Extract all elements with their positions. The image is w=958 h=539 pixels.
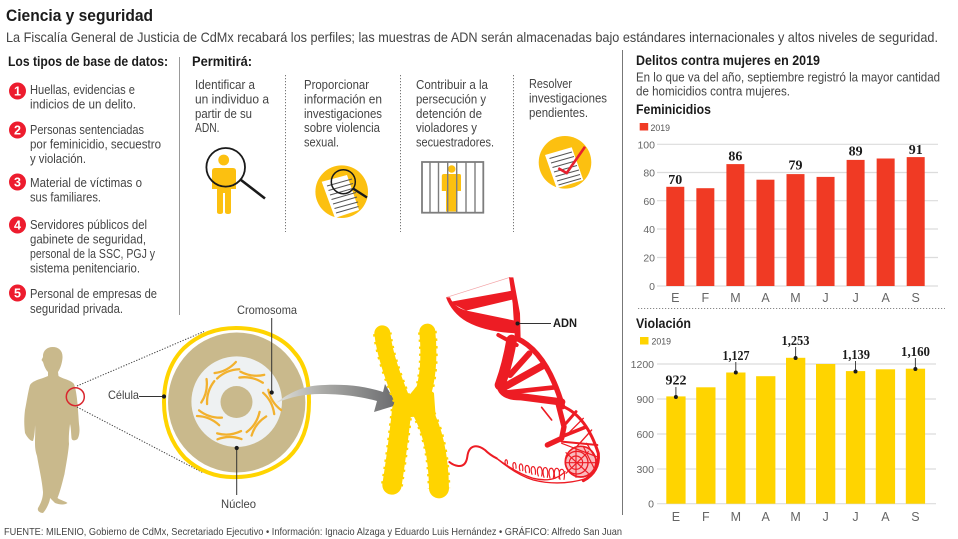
illustration: human body (24, 347, 84, 513)
value labels: 89 (849, 144, 863, 160)
y axis labels: 0 (648, 498, 654, 510)
nucleus (191, 356, 282, 447)
x axis labels (671, 291, 920, 305)
x axis labels (672, 510, 920, 524)
bars (666, 157, 925, 286)
list item 3: Material de víctimas o (30, 175, 142, 190)
x axis labels: J (852, 510, 859, 524)
cytoplasm (168, 332, 305, 472)
text: proporcionar: información en (304, 92, 382, 106)
description (636, 70, 940, 99)
list item 4: Servidores públicos del (30, 217, 147, 232)
text: contribuir: detención de (416, 106, 482, 121)
panel: tipos de base de datos (8, 54, 168, 316)
text: resolver (529, 76, 607, 120)
x axis labels: S (912, 291, 920, 305)
label: cromosoma: Cromosoma (237, 303, 297, 317)
list item 3: sus familiares. (30, 190, 101, 204)
legend (640, 337, 671, 348)
text: proporcionar (304, 77, 382, 150)
x axis labels: A (882, 291, 891, 305)
x axis labels: M (790, 291, 801, 305)
icon: body silhouette (24, 347, 80, 513)
gridlines (657, 364, 936, 504)
value labels: 91 (909, 143, 923, 158)
list item 5: seguridad privada. (30, 301, 123, 316)
x axis labels: E (672, 510, 680, 524)
value labels (668, 143, 923, 188)
list item 3 (9, 174, 142, 204)
list item 5: Personal de empresas de (30, 286, 157, 301)
list item 2: 2 (14, 124, 21, 138)
value labels: 922 (666, 374, 686, 388)
list item 1: 1 (14, 84, 21, 98)
illustration: big chromosome (382, 332, 439, 488)
red circle highlight (66, 388, 84, 406)
x axis labels: S (911, 510, 920, 524)
label: ADN (516, 316, 577, 330)
value labels: 1,160 (901, 345, 930, 360)
text: contribuir: secuestradores. (416, 134, 494, 150)
heading: tipos de base de datos: Los tipos de base de datos: (8, 54, 168, 69)
list item 4 (9, 216, 155, 276)
value labels: 1,253 (782, 334, 810, 349)
chart: violación (631, 316, 936, 524)
y axis labels: 20 (643, 252, 655, 264)
illustration: cell (108, 303, 309, 511)
x axis labels: A (881, 510, 890, 524)
text: resolver: Resolver (529, 76, 573, 91)
arrow: nucleus to chromosome (276, 384, 397, 412)
x axis labels: M (731, 510, 741, 524)
y axis labels: 40 (643, 224, 655, 236)
y axis labels: 600 (636, 429, 654, 441)
text: identificar (195, 77, 270, 135)
panel: permitirá (192, 54, 607, 232)
x axis labels: F (702, 510, 710, 524)
text: contribuir: violadores y (416, 120, 477, 135)
text: identificar: partir de su (195, 106, 252, 121)
list item 4: 4 (14, 218, 21, 232)
text: identificar: un individuo a (195, 92, 270, 106)
x axis labels: J (852, 291, 859, 305)
label: núcleo (221, 446, 256, 511)
panel: delitos contra mujeres header (636, 53, 940, 99)
label: ADN: ADN (553, 316, 577, 330)
list item 3: 3 (14, 176, 21, 190)
legend: 2019 (650, 123, 670, 134)
x axis labels: M (790, 510, 801, 524)
y axis labels: 300 (636, 464, 654, 476)
x axis labels: J (822, 510, 829, 524)
cell membrane (164, 328, 309, 477)
y axis labels (631, 359, 654, 510)
y axis labels (637, 140, 655, 293)
list item 2: por feminicidio, secuestro (30, 136, 161, 152)
text: proporcionar: sexual. (304, 134, 339, 150)
value labels: 86 (728, 150, 742, 164)
text: proporcionar: investigaciones (304, 106, 382, 121)
heading: feminicidios: Feminicidios (636, 102, 711, 117)
label: célula (108, 388, 166, 402)
value labels: 1,139 (842, 348, 870, 363)
value labels: 70 (668, 173, 682, 188)
list item 4: personal de la SSC, PGJ y (30, 246, 155, 261)
list item 1: indicios de un delito. (30, 96, 136, 112)
y axis labels: 60 (643, 196, 655, 208)
list item 2: y violación. (30, 151, 86, 166)
text: contribuir: Contribuir a la (416, 77, 489, 92)
bars (666, 358, 925, 504)
y axis labels: 900 (636, 394, 654, 406)
chromosomes (197, 362, 281, 440)
icon: person under magnifier (206, 148, 265, 214)
icon: document with red check (539, 136, 591, 189)
description: de homicidios contra mujeres. (636, 84, 790, 99)
label: célula: Célula (108, 388, 139, 402)
label: núcleo: Núcleo (221, 497, 256, 511)
list item 4: gabinete de seguridad, (30, 232, 146, 246)
callout leaders (674, 347, 917, 399)
value labels (666, 334, 930, 388)
list item 5 (9, 284, 157, 316)
y axis labels: 80 (643, 168, 655, 180)
icon: document under magnifier (315, 165, 368, 218)
text: identificar: Identificar a (195, 77, 256, 92)
text: contribuir: persecución y (416, 92, 486, 106)
icon: person behind bars (422, 162, 483, 213)
heading: permitirá: Permitirá: (192, 54, 252, 69)
gridlines (657, 144, 938, 286)
legend: 2019 (652, 337, 671, 348)
text: resolver: pendientes. (529, 105, 588, 120)
x axis labels: F (701, 291, 709, 305)
legend (640, 123, 670, 134)
list item 5: 5 (14, 286, 21, 300)
list item 2: Personas sentenciadas (30, 122, 144, 137)
x axis labels: A (762, 510, 771, 524)
title: Ciencia y seguridad (6, 6, 153, 25)
text: contribuir (416, 77, 494, 150)
y axis labels: 0 (649, 281, 655, 293)
x axis labels: E (671, 291, 679, 305)
footer credits: FUENTE: MILENIO, Gobierno de CdMx, Secretariado Ejecutivo • Información: Ignacio Alzaga y Eduardo Luis Hernández • GRÁFICO: Alfredo San Juan (4, 525, 622, 538)
text: identificar: ADN. (195, 120, 220, 135)
x axis labels: M (730, 291, 741, 305)
text: proporcionar: sobre violencia (304, 120, 381, 135)
x axis labels: J (822, 291, 829, 305)
x axis labels: A (761, 291, 770, 305)
y axis labels: 100 (637, 140, 655, 152)
chart: feminicidios (636, 102, 938, 305)
heading: violación: Violación (636, 316, 691, 331)
list item 4: sistema penitenciario. (30, 260, 140, 276)
list item 2 (9, 122, 161, 166)
list item 1: Huellas, evidencias e (30, 82, 135, 97)
y axis labels: 1200 (631, 359, 654, 371)
value labels: 79 (788, 158, 802, 174)
text: proporcionar: Proporcionar (304, 77, 370, 92)
label: cromosoma (237, 303, 297, 395)
value labels: 1,127 (722, 349, 750, 364)
text: resolver: investigaciones (529, 90, 607, 106)
nucleolus (220, 386, 252, 418)
illustration: DNA helix (446, 277, 598, 483)
heading: delitos: Delitos contra mujeres en 2019 (636, 53, 820, 68)
list item 1 (9, 82, 136, 112)
